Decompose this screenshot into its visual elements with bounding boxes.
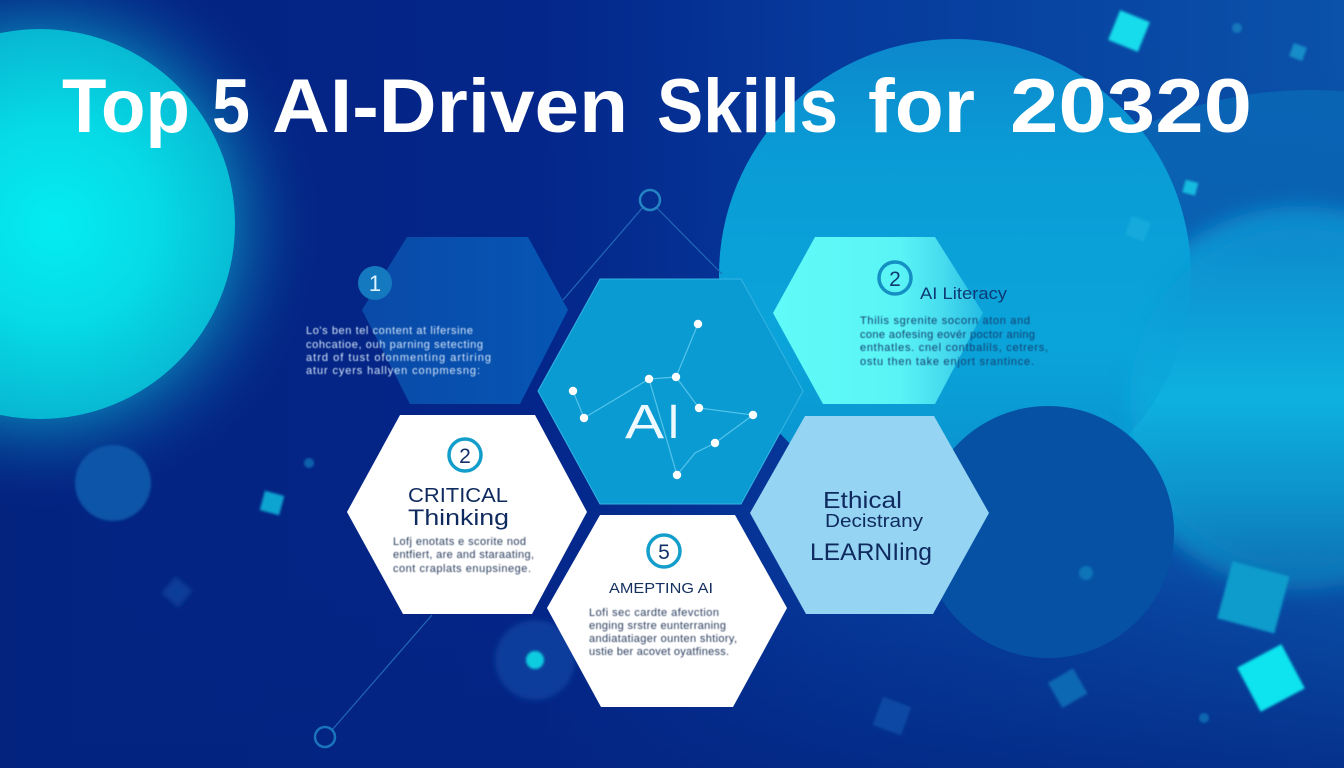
AI label: I [667,396,680,449]
heading Critical Thinking: CRITICAL [408,485,508,507]
number badge 5: 5 [658,541,670,564]
title: 20320 [1010,64,1252,149]
heading Critical Thinking: Thinking [408,505,509,530]
body text: Lofj enotats e scorite nod [393,536,526,548]
number badge 2 [879,262,911,294]
heading Critical Thinking [408,485,509,530]
number badge 5 [648,535,680,567]
number badge 1: 1 [369,271,381,296]
body text 2: Thilis sgrenite socorn aton and [860,315,1030,327]
body text: cont craplats enupsinege. [393,563,531,575]
constellation network [569,320,757,479]
title: for [868,64,975,149]
body text [393,536,534,575]
panel: skill 2 AI Literacy [773,237,1048,404]
body text 1 [306,325,491,377]
heading Ethical: Ethical [823,487,902,513]
body text 1: atur cyers hallyen conpmesng: [306,365,480,377]
body text 2: cone aofesing eovér poctor aning [860,329,1035,341]
decorative cyan circle left [0,29,235,419]
body text: Lofi sec cardte afevction [589,607,719,619]
panel: center AI hexagon [538,279,803,504]
panel: Ethical Decision [750,416,989,614]
panel: Critical Thinking [347,415,587,614]
AI label: A [625,396,664,449]
body text 1: cohcatioe, ouh parning setecting [306,339,483,351]
heading Ethical [810,487,932,566]
heading Ethical: LEARNIing [810,539,932,566]
title: AI-Driven [272,64,628,149]
number badge 1 [358,266,392,300]
body text 2 [860,315,1048,368]
body text 2: ostu then take enjort srantince. [860,356,1034,368]
title: Top [62,64,190,149]
title: 5 [212,64,250,149]
body text [589,607,737,658]
body text 2: enthatles. cnel contbalils, cetrers, [860,342,1048,354]
body text 1: Lo's ben tel content at lifersine [306,325,473,337]
heading Amepting AI: AMEPTING AI [609,580,713,597]
panel: skill 1 [306,237,568,404]
connector lines and ring nodes [315,190,722,747]
number badge: 2 [459,445,471,468]
body text: ustie ber acovet oyatfiness. [589,646,729,658]
body text: entfiert, are and staraating, [393,549,534,561]
body text: enging srstre eunterraning [589,620,726,632]
body text: andiatatiager ounten shtiory, [589,633,737,645]
title: Skills [657,64,838,149]
number badge [449,439,481,471]
panel: Amepting AI [547,515,787,707]
number badge 2: 2 [889,268,901,291]
heading Ethical: Decistrany [825,511,923,531]
heading AI Literacy: AI Literacy [920,284,1008,303]
body text 1: atrd of tust ofonmenting artiring [306,352,491,364]
